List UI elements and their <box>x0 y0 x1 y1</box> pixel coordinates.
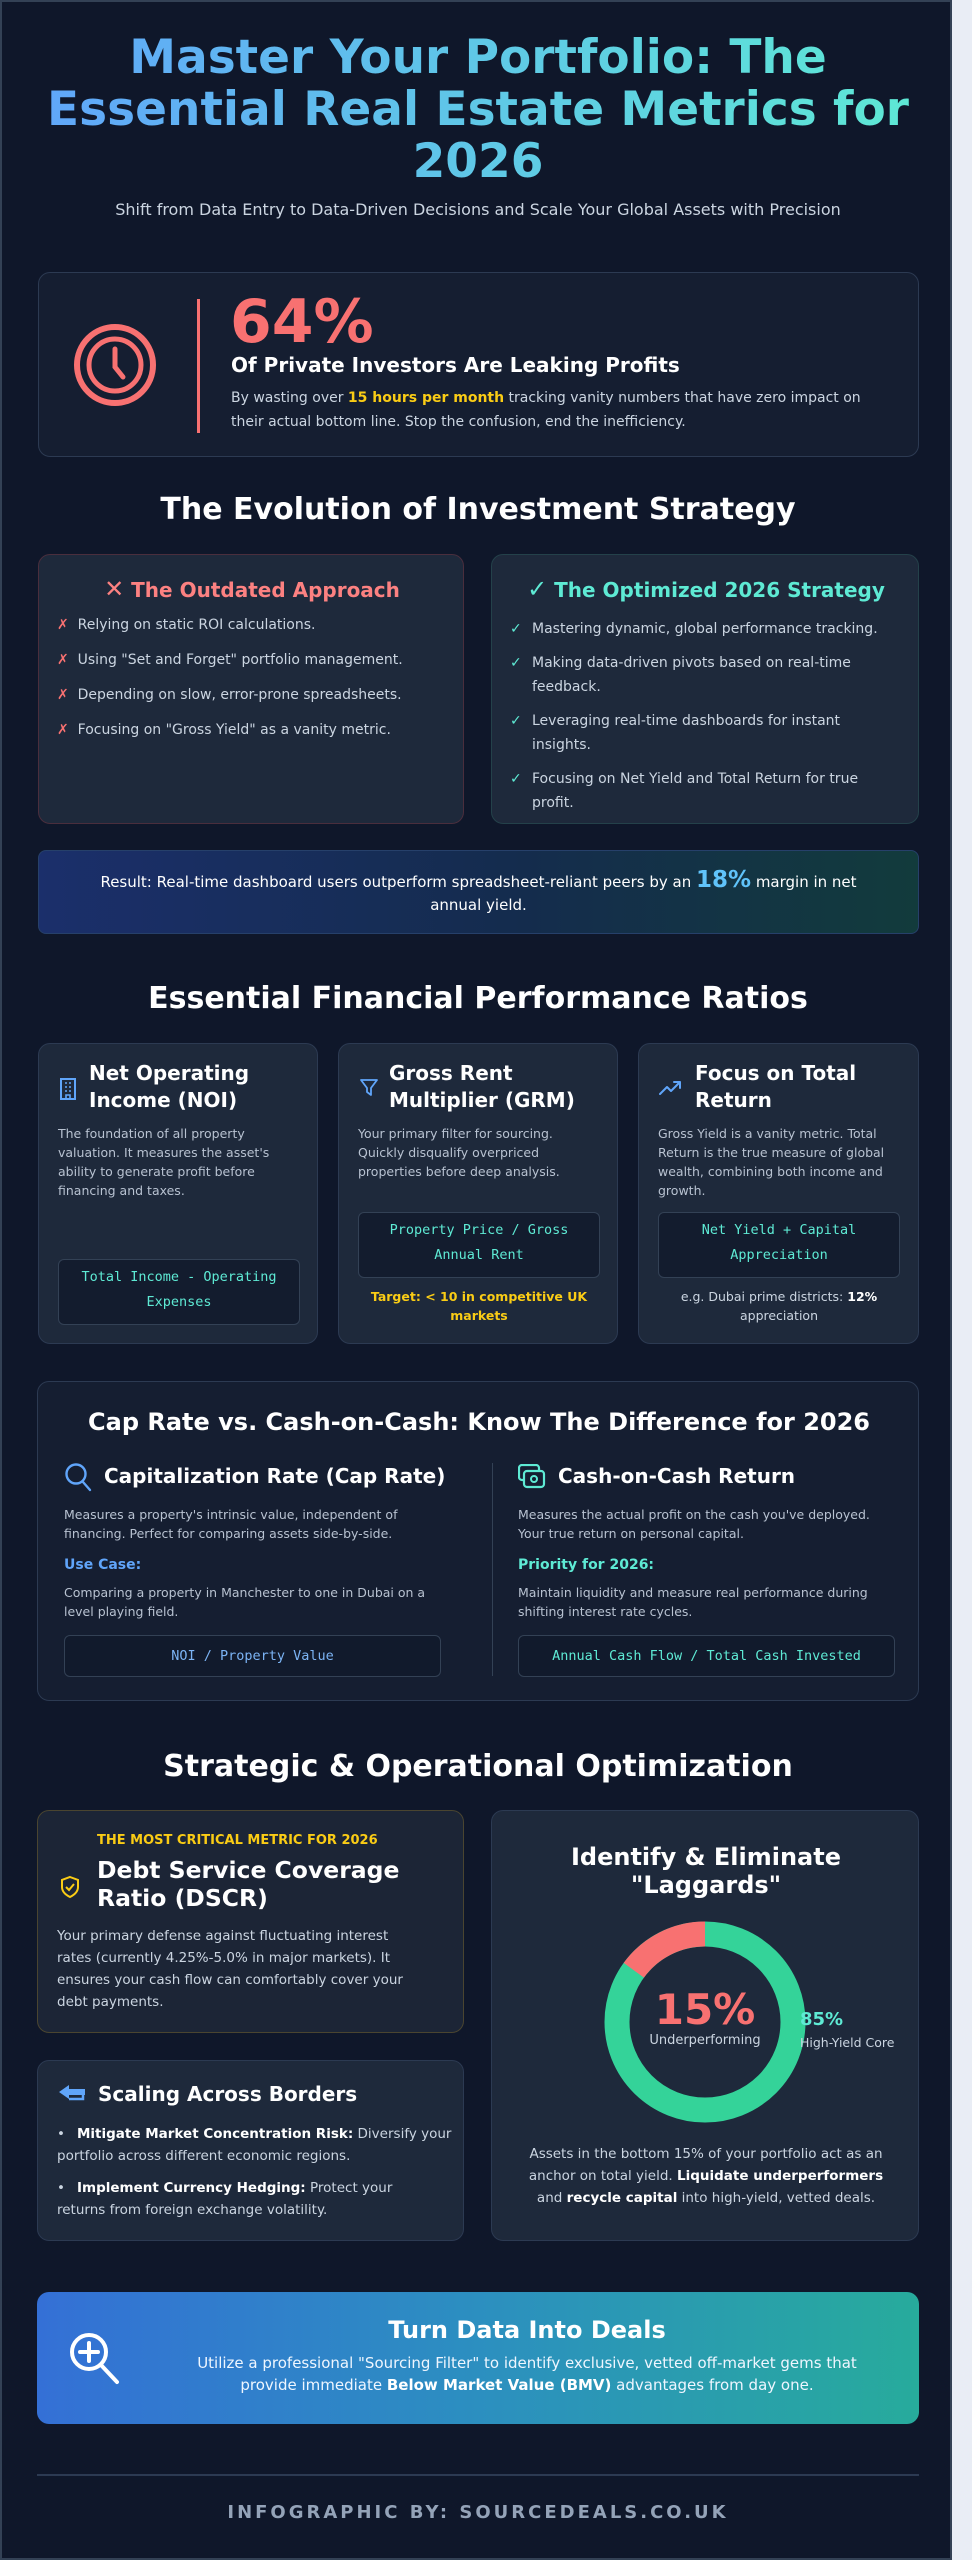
cap rate column: Measures a property's intrinsic value, independent of <box>64 1507 397 1522</box>
card: GRM: Annual Rent <box>434 1247 524 1263</box>
panel: outdated <box>38 554 464 824</box>
cap rate column: level playing field. <box>64 1604 178 1619</box>
panel: optimized: Leveraging real-time dashboards for instant <box>532 713 840 729</box>
card: laggards: "Laggards" <box>631 1871 781 1899</box>
panel: optimized: ✓ <box>510 621 522 637</box>
card: GRM: Gross Rent <box>389 1061 513 1085</box>
icon: search <box>65 1463 92 1492</box>
cap rate column: Capitalization Rate (Cap Rate) <box>104 1464 445 1488</box>
card: GRM: properties before deep analysis. <box>358 1164 560 1179</box>
heading: ratios: Essential Financial Performance Ratios <box>148 981 808 1016</box>
card: NOI: Net Operating <box>89 1061 249 1085</box>
card: DSCR: Ratio (DSCR) <box>97 1884 268 1912</box>
icon: filter <box>360 1079 378 1096</box>
card: total return: Return <box>695 1088 772 1112</box>
card: total return: Net Yield + Capital Appreciation <box>702 1222 856 1263</box>
stat text: their actual bottom line. Stop the confusion, end the inefficiency. <box>231 414 686 430</box>
panel: optimized: ✓ The Optimized 2026 Strategy <box>527 575 885 603</box>
icon: arrow swap <box>59 2085 85 2100</box>
result banner: Result: Real-time dashboard users outperform spreadsheet-reliant peers by an 18% margin in net <box>100 867 857 893</box>
result banner <box>38 850 919 934</box>
stat text: By wasting over 15 hours per month tracking vanity numbers that have zero impact on <box>231 390 861 406</box>
card: scaling: returns from foreign exchange volatility. <box>57 2202 327 2218</box>
card: GRM: Target: < 10 in competitive UK markets <box>371 1289 587 1323</box>
footer: INFOGRAPHIC BY: SOURCEDEALS.CO.UK <box>227 2502 729 2523</box>
donut chart <box>604 1922 806 2122</box>
panel: optimized: insights. <box>532 737 591 753</box>
title: Master Your Portfolio: The Essential Real Estate Metrics for 2026 <box>47 30 909 189</box>
panel: outdated: ✕ The Outdated Approach <box>104 575 400 603</box>
icon: zoom plus <box>70 2333 120 2384</box>
stat heading: Of Private Investors Are Leaking Profits <box>231 353 680 377</box>
card: laggards: anchor on total yield. Liquidate underperformers <box>529 2168 883 2184</box>
card: GRM: Multiplier (GRM) <box>389 1088 575 1112</box>
card: NOI: Total Income - Operating Expenses <box>81 1269 277 1310</box>
CTA banner: provide immediate Below Market Value (BMV) advantages from day one. <box>240 2376 814 2394</box>
heading: evolution: The Evolution of Investment Strategy <box>160 492 796 527</box>
cap rate column: Use Case: <box>64 1557 141 1573</box>
panel: optimized <box>491 554 919 824</box>
card: laggards: Identify & Eliminate <box>571 1843 841 1871</box>
result banner: annual yield. <box>430 896 527 914</box>
card: scaling: Mitigate Market Concentration Risk: Diversify your portfolio across different economic regions. <box>57 2126 451 2164</box>
card: DSCR: Your primary defense against fluctuating interest <box>57 1928 388 1944</box>
card: DSCR <box>37 1810 464 2033</box>
cash-on-cash column: Maintain liquidity and measure real performance during <box>518 1585 868 1600</box>
panel: optimized: Mastering dynamic, global performance tracking. <box>532 621 878 637</box>
card: total return: e.g. Dubai prime districts: 12% appreciation <box>681 1289 877 1323</box>
card: GRM: Quickly disqualify overpriced <box>358 1145 539 1160</box>
icon: clock <box>74 324 156 406</box>
cash-on-cash column: Cash-on-Cash Return <box>558 1464 795 1488</box>
heading: strategic: Strategic & Operational Optimization <box>163 1749 793 1784</box>
card: DSCR: rates (currently 4.25%-5.0% in major markets). It <box>57 1950 390 1966</box>
panel: optimized: Making data-driven pivots based on real-time <box>532 655 851 671</box>
panel: optimized: ✓ <box>510 713 522 729</box>
cap rate column: NOI / Property Value <box>171 1648 334 1664</box>
CTA banner <box>37 2292 919 2424</box>
card: scaling: Scaling Across Borders <box>98 2082 357 2106</box>
card: laggards: 85% <box>800 2009 843 2030</box>
CTA banner: Turn Data Into Deals <box>388 2316 666 2344</box>
icon: building <box>60 1078 76 1100</box>
card: DSCR: debt payments. <box>57 1994 164 2010</box>
stat number: 64% <box>230 287 374 357</box>
panel: outdated: ✗ Using "Set and Forget" portfolio management. <box>57 652 403 668</box>
panel: outdated: ✗ Focusing on "Gross Yield" as a vanity metric. <box>57 722 391 738</box>
CTA banner: Utilize a professional "Sourcing Filter" to identify exclusive, vetted off-market gems that <box>197 2354 857 2372</box>
panel: outdated: ✗ Depending on slow, error-prone spreadsheets. <box>57 687 402 703</box>
card: laggards <box>491 1810 919 2241</box>
card: DSCR: THE MOST CRITICAL METRIC FOR 2026 <box>97 1833 378 1848</box>
card: scaling: • <box>57 2180 65 2196</box>
panel: optimized: ✓ <box>510 655 522 671</box>
card: laggards: Underperforming <box>649 2033 761 2048</box>
panel: optimized: feedback. <box>532 679 601 695</box>
card: total return <box>638 1043 919 1344</box>
panel: cap rate vs cash-on-cash: Cap Rate vs. Cash-on-Cash: Know The Difference for 2026 <box>88 1408 870 1436</box>
card: scaling: • <box>57 2126 65 2142</box>
cap rate column <box>64 1463 445 1677</box>
cap rate column: Comparing a property in Manchester to one in Dubai on a <box>64 1585 425 1600</box>
icon: cash <box>518 1464 546 1488</box>
card: laggards: 15% <box>655 1985 755 2034</box>
card: GRM: Your primary filter for sourcing. <box>358 1126 553 1141</box>
card: total return: Gross Yield is a vanity metric. Total Return is the true measure of global wealth, combining both income and growth. <box>658 1126 884 1198</box>
card: DSCR: Debt Service Coverage <box>97 1856 399 1884</box>
icon: shield <box>61 1876 79 1898</box>
panel: optimized: profit. <box>532 795 574 811</box>
stat text <box>231 390 861 430</box>
cash-on-cash column: Measures the actual profit on the cash you've deployed. <box>518 1507 870 1522</box>
card: scaling: Implement Currency Hedging: Protect your <box>77 2180 392 2196</box>
cash-on-cash column: Your true return on personal capital. <box>518 1526 744 1541</box>
card: laggards: Assets in the bottom 15% of your portfolio act as an <box>529 2146 883 2162</box>
panel: stat <box>38 272 919 457</box>
card: GRM: Property Price / Gross <box>390 1222 568 1238</box>
card: total return: Focus on Total <box>695 1061 856 1085</box>
panel: cap rate vs cash-on-cash <box>37 1381 919 1701</box>
card: laggards: and recycle capital into high-yield, vetted deals. <box>537 2190 875 2206</box>
card: GRM <box>338 1043 618 1344</box>
cash-on-cash column: Priority for 2026: <box>518 1557 654 1573</box>
panel: optimized: Focusing on Net Yield and Total Return for true <box>532 771 858 787</box>
card: NOI: Income (NOI) <box>89 1088 237 1112</box>
cash-on-cash column: shifting interest rate cycles. <box>518 1604 692 1619</box>
card: NOI <box>38 1043 318 1344</box>
cash-on-cash column <box>518 1464 895 1677</box>
subtitle: Shift from Data Entry to Data-Driven Decisions and Scale Your Global Assets with Precision <box>115 200 841 219</box>
card: scaling <box>37 2060 464 2241</box>
cash-on-cash column: Annual Cash Flow / Total Cash Invested <box>552 1648 861 1664</box>
icon: trend up <box>659 1081 681 1095</box>
panel: optimized: ✓ <box>510 771 522 787</box>
cap rate column: financing. Perfect for comparing assets side-by-side. <box>64 1526 392 1541</box>
panel: outdated: ✗ Relying on static ROI calculations. <box>57 617 316 633</box>
card: laggards: High-Yield Core <box>800 2035 894 2050</box>
card: DSCR: ensures your cash flow can comfortably cover your <box>57 1972 403 1988</box>
card: NOI: The foundation of all property valuation. It measures the asset's ability to generate profit before financing and taxes. <box>58 1126 269 1198</box>
